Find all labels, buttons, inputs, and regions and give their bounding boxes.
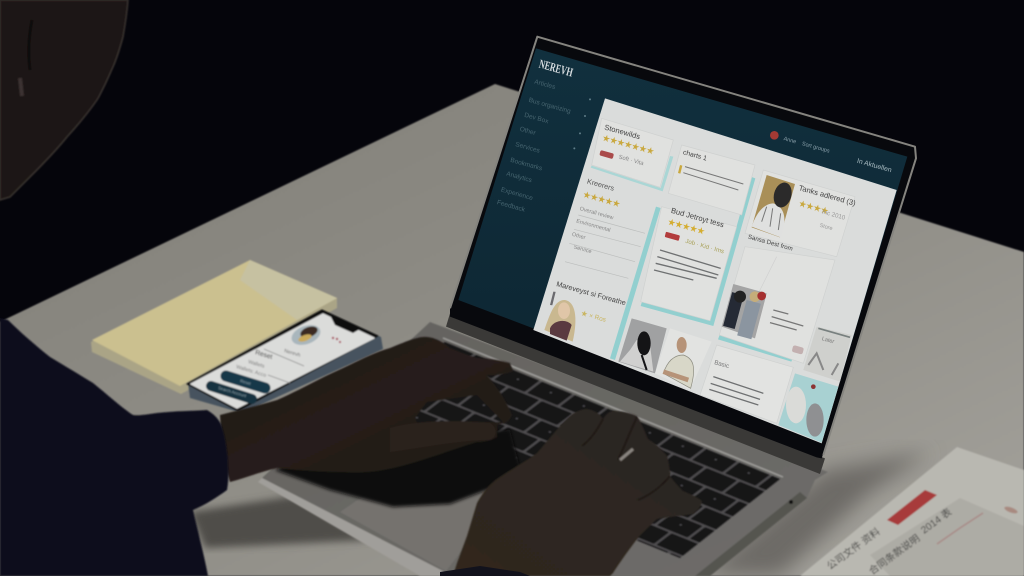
phone profile text bbox=[236, 348, 301, 379]
card: group photo bbox=[719, 247, 835, 363]
sidebar menu: Analytics bbox=[506, 170, 533, 185]
phone notch bbox=[330, 315, 360, 333]
sidebar chevrons bbox=[573, 98, 591, 149]
document text: 公司文件 资料 bbox=[824, 525, 883, 572]
wedding ring bbox=[620, 449, 633, 460]
card: sketch top right: Later bbox=[821, 336, 835, 345]
sidebar menu: Experience bbox=[500, 186, 534, 202]
sidebar menu bbox=[496, 79, 572, 214]
phone profile text: Nerevh bbox=[284, 348, 301, 359]
card: rating summary: ★★★★★★★ bbox=[602, 133, 655, 156]
hand shadow bbox=[275, 430, 520, 507]
card: reviewer with portrait: Store bbox=[819, 223, 833, 232]
laptop lid bbox=[446, 37, 916, 474]
card: list: Other bbox=[571, 232, 586, 241]
group illustration bbox=[722, 284, 767, 339]
finger separations bbox=[582, 417, 670, 500]
header bar: Anne bbox=[783, 136, 797, 145]
card: notes bbox=[700, 345, 793, 423]
portrait illustration bbox=[752, 175, 795, 237]
ear crease bbox=[29, 20, 32, 70]
card: rating summary: Soft · Vita bbox=[618, 154, 645, 167]
card: list: Overall review bbox=[579, 206, 614, 221]
card: list: Kreerers bbox=[586, 177, 616, 193]
card: rating summary: Stonewilds bbox=[604, 123, 641, 141]
card: list: Service bbox=[573, 244, 592, 255]
card: man with crossed arms bbox=[655, 328, 712, 390]
card: illustrated pair bbox=[778, 373, 838, 443]
paperwork bbox=[800, 447, 1024, 576]
card: rating summary bbox=[592, 118, 673, 187]
sweater sleeve bbox=[0, 318, 228, 576]
card: list: Environmental bbox=[576, 218, 611, 234]
phone buttons bbox=[226, 376, 265, 388]
laptop shadow on table bbox=[190, 452, 930, 576]
profile avatar bbox=[289, 321, 323, 349]
card: sketch top right bbox=[803, 327, 852, 382]
hands bbox=[220, 337, 702, 576]
card: reviewer with portrait bbox=[745, 170, 857, 257]
laptop bbox=[258, 37, 916, 576]
card: illustrated woman bbox=[544, 279, 627, 342]
red underline mark bbox=[937, 513, 983, 544]
sidebar menu: Feedback bbox=[496, 199, 526, 214]
card: featured review: ★★★★★ bbox=[667, 217, 706, 236]
sidebar panel bbox=[458, 48, 907, 443]
card: list: ★★★★★ bbox=[582, 190, 621, 209]
phone profile text: Wallets bbox=[248, 359, 265, 370]
paper sheet bbox=[800, 447, 1024, 576]
sidebar menu: Dev Box bbox=[524, 112, 550, 125]
card: reviewer with portrait: Tanks adlered (3) bbox=[798, 183, 857, 208]
card: illustrated woman: Mareveyst si Foreathe bbox=[556, 279, 627, 307]
right sleeve cuff bbox=[440, 566, 530, 576]
card: reviewer with portrait: Inc 2010 bbox=[821, 208, 846, 222]
sidebar menu: Other bbox=[519, 126, 537, 137]
card: illustrated woman: ★ × Ros bbox=[580, 310, 607, 324]
left hand bbox=[220, 337, 513, 482]
phone screen bbox=[191, 314, 374, 408]
sidebar menu: Articles bbox=[534, 79, 557, 91]
teal accents bbox=[591, 156, 793, 362]
phone profile text: Reset bbox=[255, 349, 273, 361]
phone button labels: Search Account bbox=[218, 385, 247, 399]
right hand bbox=[453, 409, 702, 576]
red label bbox=[887, 490, 937, 525]
sidebar menu: Bus organizing bbox=[528, 97, 572, 115]
header bar: In Aktuellen bbox=[856, 158, 892, 174]
card: featured review: Job · Kid · Ims bbox=[685, 238, 725, 255]
card: featured review bbox=[641, 206, 737, 321]
document text bbox=[824, 505, 954, 576]
card: list bbox=[565, 177, 645, 278]
card: notes: Basic bbox=[714, 359, 730, 370]
keyboard bbox=[340, 342, 780, 558]
phone button labels: Reset bbox=[240, 378, 252, 386]
card: charts: charts 1 bbox=[682, 149, 708, 163]
main content area bbox=[533, 98, 897, 443]
card: masked figure portrait bbox=[618, 318, 667, 373]
hinge band bbox=[446, 313, 825, 474]
card: charts bbox=[668, 145, 755, 215]
card: featured review: Bud Jetroyt tess bbox=[670, 206, 725, 229]
header bar bbox=[770, 131, 892, 174]
phone body bbox=[188, 310, 383, 413]
phone divider lines bbox=[264, 349, 304, 383]
keys visible between fingers bbox=[415, 395, 503, 423]
card: reviewer with portrait: Sansa Dest from bbox=[747, 233, 793, 253]
document text: 2014 表 bbox=[918, 505, 954, 536]
smartphone bbox=[187, 310, 383, 413]
brand name: NEREVH bbox=[538, 57, 575, 80]
lid rim bbox=[450, 37, 916, 455]
phone button labels bbox=[218, 378, 252, 399]
card: reviewer with portrait: ★★★★ bbox=[798, 199, 830, 216]
phone profile text: Wallets: Acco bbox=[236, 364, 267, 379]
laptop base bbox=[258, 322, 828, 576]
left hand thumb highlight bbox=[390, 421, 496, 452]
header bar: Sort groups bbox=[801, 141, 830, 155]
sidebar menu: Bookmarks bbox=[510, 157, 544, 173]
notebook bbox=[91, 260, 337, 394]
lid frame bbox=[450, 37, 916, 458]
sidebar menu: Services bbox=[515, 141, 541, 155]
red hearts bbox=[332, 337, 341, 343]
person head bbox=[0, 0, 128, 200]
